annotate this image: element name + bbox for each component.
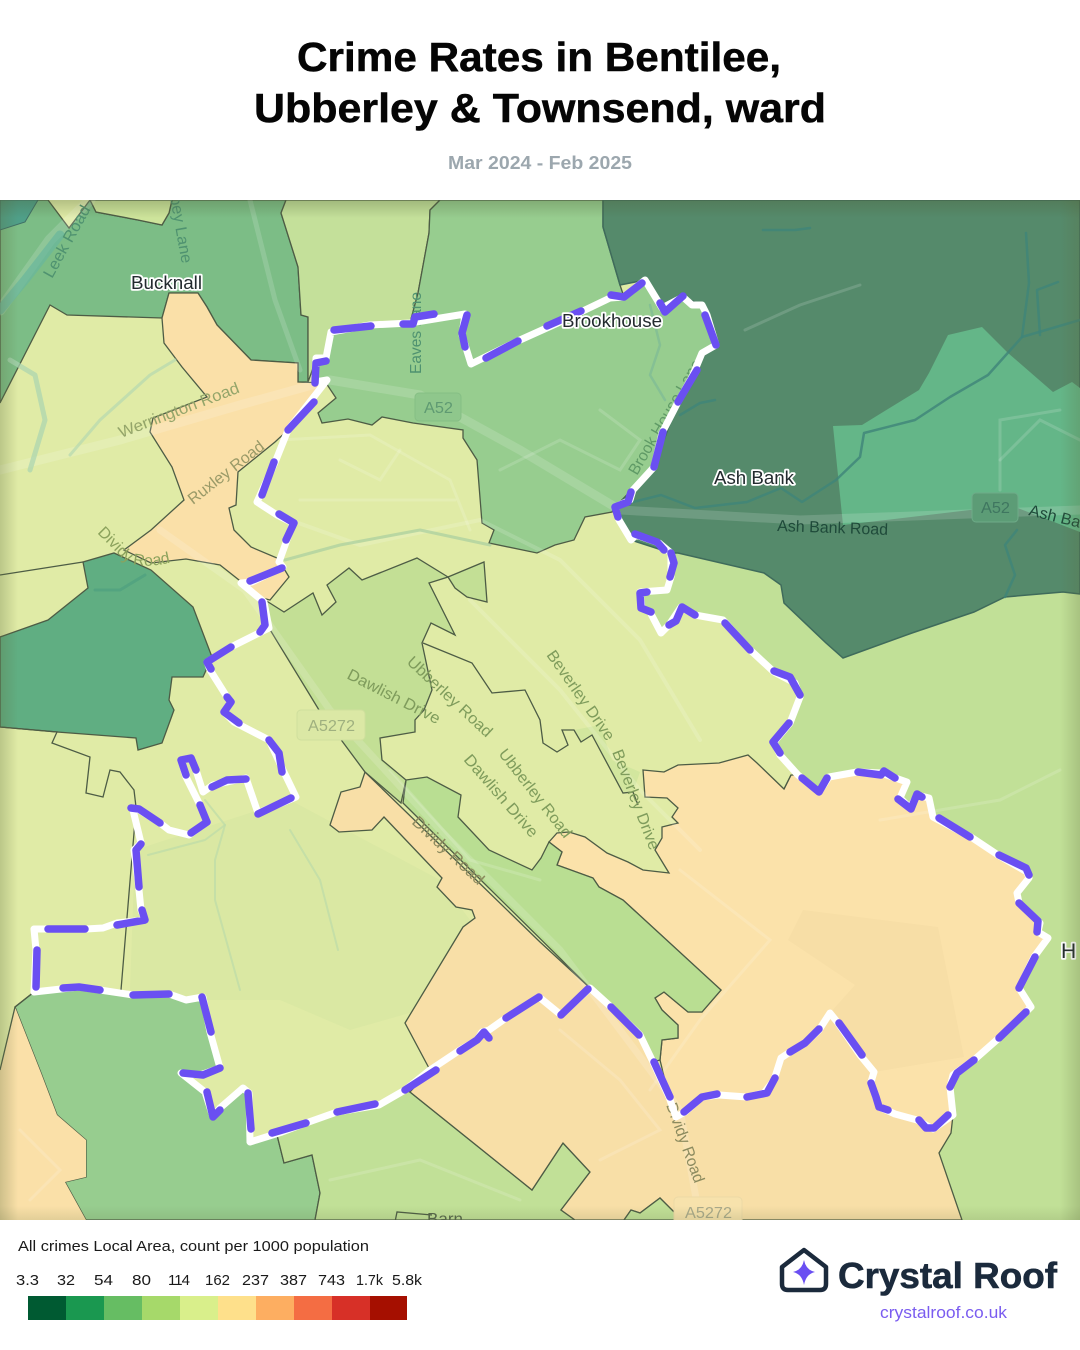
legend tick labels: 387 bbox=[280, 1272, 307, 1289]
road labels: Dividy Road bbox=[662, 1101, 707, 1185]
boundary lines between pale areas bbox=[0, 562, 791, 1222]
title: Crime Rates in Bentilee, bbox=[297, 34, 781, 80]
road shield: A5272 centre bbox=[297, 710, 365, 740]
region: bottom green fragment bbox=[624, 1197, 674, 1220]
road labels: Beverley Drive bbox=[608, 747, 662, 852]
legend tick labels bbox=[16, 1272, 423, 1289]
legend tick labels: 32 bbox=[57, 1272, 75, 1289]
region: Bentilee east orange bbox=[549, 755, 1048, 1129]
title bbox=[254, 34, 826, 131]
choropleth map bbox=[0, 200, 1080, 1220]
legend tick labels: 3.3 bbox=[16, 1272, 39, 1289]
legend tick labels: 162 bbox=[205, 1272, 230, 1289]
region: east light green bbox=[640, 553, 1080, 1220]
region: Brookhouse green bbox=[315, 200, 716, 553]
road shield: A52 east: A52 bbox=[981, 500, 1010, 517]
road shield: A52 west: A52 bbox=[424, 400, 453, 417]
region: Ash Bank dark green bbox=[603, 200, 1080, 658]
legend title: All crimes Local Area, count per 1000 population bbox=[18, 1238, 369, 1255]
region: Ubberley green strip bbox=[403, 777, 721, 1062]
region: south light green bbox=[277, 1090, 590, 1220]
region: south-west corner orange bbox=[0, 1007, 86, 1220]
region: small green block bbox=[448, 562, 487, 602]
region: south-west green bbox=[15, 987, 320, 1220]
logo wordmark: Crystal Roof bbox=[838, 1255, 1058, 1296]
region: Dividy Road orange strip and south bbox=[330, 772, 962, 1220]
road labels: Dividy Road bbox=[98, 526, 170, 566]
road labels: Beverley Drive bbox=[543, 648, 618, 744]
region: Dawlish Drive green bbox=[265, 558, 455, 803]
map edge vignette bbox=[0, 200, 1080, 1220]
road labels: Dawlish Drive bbox=[460, 751, 541, 841]
place labels: Ash Bank bbox=[714, 468, 795, 488]
legend tick labels: 114 bbox=[168, 1272, 190, 1289]
region: small pale north area bbox=[90, 200, 172, 225]
road shield: A5272 south: A5272 bbox=[685, 1205, 732, 1222]
legend tick labels: 1.7k bbox=[356, 1272, 383, 1289]
legend tick labels: 743 bbox=[318, 1272, 345, 1289]
region: top-left teal corner bbox=[0, 200, 38, 230]
road shield: A52 west bbox=[415, 393, 461, 421]
road labels: Barn bbox=[427, 1211, 463, 1228]
legend tick labels: 5.8k bbox=[392, 1272, 423, 1289]
water courses bbox=[0, 228, 1080, 990]
place labels: H bbox=[1061, 940, 1076, 963]
legend bbox=[16, 1238, 423, 1320]
title: Ubberley & Townsend, ward bbox=[254, 85, 826, 131]
ward boundary: purple dashes bbox=[36, 283, 1038, 1133]
logo: Crystal Roof bbox=[782, 1250, 1058, 1322]
road shield: A5272 centre: A5272 bbox=[308, 718, 355, 735]
road labels: Ubberley Road bbox=[403, 653, 495, 741]
legend tick labels: 54 bbox=[94, 1272, 113, 1289]
region: Bentilee park shade bbox=[788, 910, 964, 1072]
road labels bbox=[43, 200, 1080, 1268]
region: central park shade bbox=[130, 800, 470, 1030]
icon: house with star bbox=[782, 1250, 826, 1290]
region: Eaves Lane pale green bbox=[281, 200, 440, 382]
roads bbox=[0, 200, 1080, 1220]
road labels: Eaves Lane bbox=[408, 292, 425, 374]
subtitle: date range: Mar 2024 - Feb 2025 bbox=[448, 153, 632, 173]
road labels: Ruxley Road bbox=[185, 438, 268, 508]
legend tick labels: 237 bbox=[242, 1272, 269, 1289]
road shield: A5272 south bbox=[674, 1196, 742, 1220]
region: east teal green bbox=[833, 327, 1080, 532]
place labels: Bucknall bbox=[131, 273, 202, 293]
road labels: bey Lane bbox=[166, 195, 195, 265]
road labels: Ash Bank Road bbox=[777, 518, 888, 539]
region: Bucknall orange bbox=[124, 293, 326, 600]
ward boundary: white line bbox=[34, 280, 1048, 1142]
road shield: A52 east bbox=[972, 493, 1018, 522]
road labels: Werrington Road bbox=[116, 380, 242, 442]
region: west dark green bbox=[0, 553, 212, 750]
place labels: Brookhouse bbox=[562, 311, 662, 331]
road labels: Dividy Road bbox=[408, 813, 487, 889]
region: Beverley green sliver bbox=[574, 725, 640, 793]
region: Bucknall north green bbox=[0, 200, 308, 403]
logo url: crystalroof.co.uk bbox=[880, 1303, 1008, 1322]
place labels bbox=[131, 273, 1076, 963]
road labels: Ubberley Road bbox=[495, 746, 575, 842]
legend tick labels: 80 bbox=[132, 1272, 151, 1289]
road labels: Brook House Lane bbox=[626, 357, 706, 478]
road labels: Dawlish Drive bbox=[344, 666, 443, 728]
road labels: Leek Road bbox=[41, 203, 94, 281]
legend colour scale bbox=[28, 1296, 407, 1320]
